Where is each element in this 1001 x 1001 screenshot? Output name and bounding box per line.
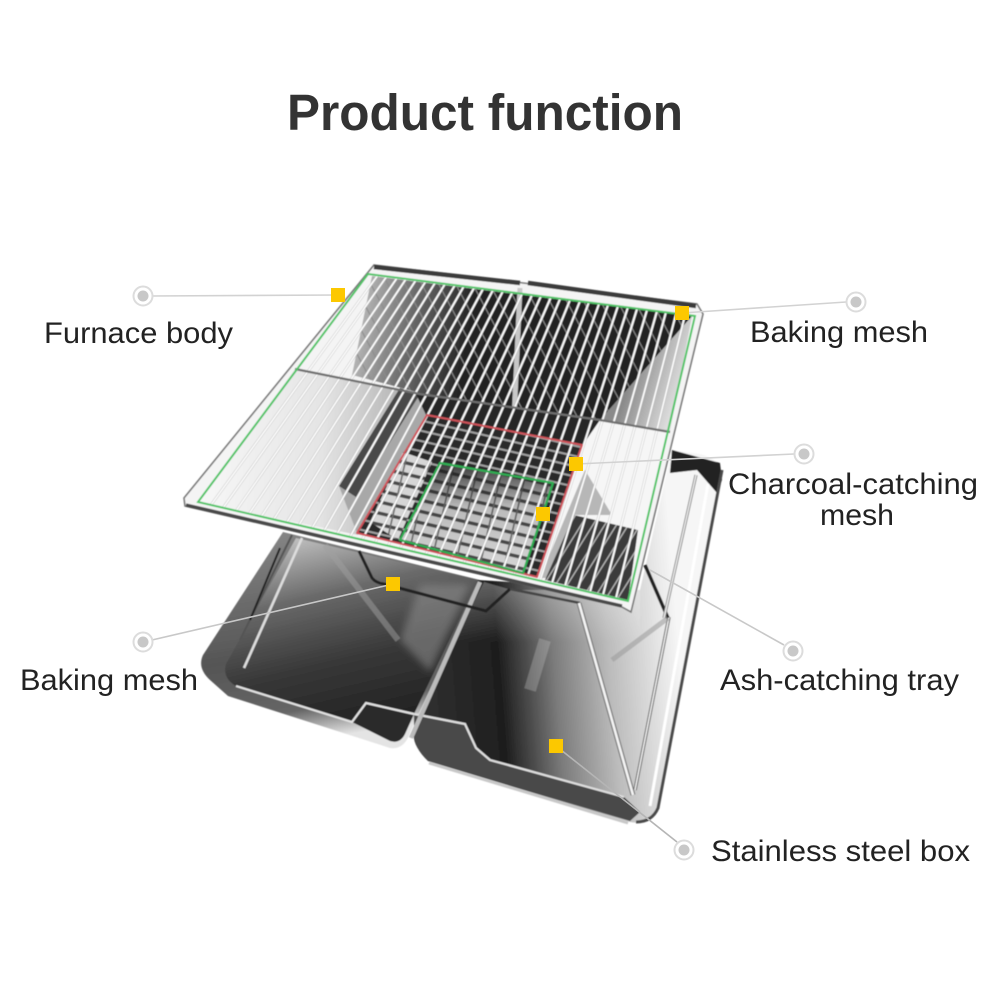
grill: dark interior walls bbox=[352, 276, 692, 420]
grill: right panel bbox=[540, 420, 670, 601]
marker: inner mesh bbox=[536, 507, 550, 521]
label: charcoal-catching mesh: mesh bbox=[820, 499, 894, 532]
grill: basket inner shadow bbox=[400, 463, 553, 573]
label: baking mesh top: Baking mesh bbox=[750, 316, 928, 349]
target dot: charcoal mesh bbox=[794, 444, 814, 464]
product photo: stainless steel box with folded grill bbox=[184, 265, 722, 823]
target dot: ash tray bbox=[784, 642, 802, 660]
grill: wires bbox=[211, 275, 685, 598]
marker: baking mesh top bbox=[675, 306, 689, 320]
marker: furnace body bbox=[331, 288, 345, 302]
leader line: stainless box bbox=[556, 746, 677, 842]
grill: basket inner bbox=[400, 463, 553, 573]
leader line: baking mesh top bbox=[682, 302, 846, 313]
label: charcoal-catching mesh: Charcoal-catching bbox=[728, 468, 978, 501]
target dot: furnace body bbox=[134, 286, 152, 306]
outline: baking mesh bbox=[198, 274, 695, 601]
label: baking mesh lower: Baking mesh bbox=[20, 664, 198, 697]
marker: baking mesh lower bbox=[386, 577, 400, 591]
grill: fold line bbox=[295, 369, 670, 432]
grill: dark band above basket bbox=[415, 392, 600, 448]
grill: right side wall bbox=[600, 316, 692, 432]
label: stainless steel box: Stainless steel box bbox=[711, 835, 970, 868]
grill: basket left glare bbox=[370, 452, 432, 540]
leader line: charcoal mesh bbox=[576, 454, 794, 464]
marker: stainless box bbox=[549, 739, 563, 753]
grill: right crosshatch bbox=[545, 515, 638, 600]
stainless steel box: centre hinge bbox=[411, 582, 480, 738]
grill: dark slab beside basket bbox=[339, 388, 420, 497]
grill: centre crease bbox=[514, 288, 520, 420]
grill: bottom dark edge bbox=[186, 505, 622, 606]
leader line: baking mesh lower bbox=[152, 584, 393, 640]
grill: shade between slab and basket bbox=[339, 395, 427, 533]
target dot: baking mesh top bbox=[846, 292, 866, 312]
grill: outer frame bbox=[184, 265, 703, 612]
label: ash-catching tray: Ash-catching tray bbox=[720, 664, 959, 697]
leader line: ash tray bbox=[650, 570, 784, 645]
label: furnace body: Furnace body bbox=[44, 317, 233, 350]
leader line: furnace body bbox=[150, 295, 338, 296]
title: Product function bbox=[287, 84, 683, 141]
target dot: baking mesh lower bbox=[134, 632, 152, 652]
target dot: stainless box bbox=[674, 840, 694, 860]
grill: top dark edge bbox=[374, 267, 696, 306]
outline: inner mesh green bbox=[400, 463, 553, 573]
marker: charcoal mesh bbox=[569, 457, 583, 471]
folding legs and handle bbox=[250, 475, 696, 795]
stainless steel box: right tray bbox=[414, 450, 722, 823]
grill: lower-left panel bbox=[198, 369, 420, 535]
grill: furnace body bbox=[184, 265, 703, 612]
stainless steel box: left tray bbox=[201, 532, 480, 748]
grill: charcoal basket bbox=[357, 415, 582, 577]
grill: ladder mesh beside basket bbox=[540, 470, 612, 578]
outline: charcoal basket red bbox=[357, 415, 582, 577]
grill: crosshatched mesh on the walls bbox=[352, 276, 692, 420]
